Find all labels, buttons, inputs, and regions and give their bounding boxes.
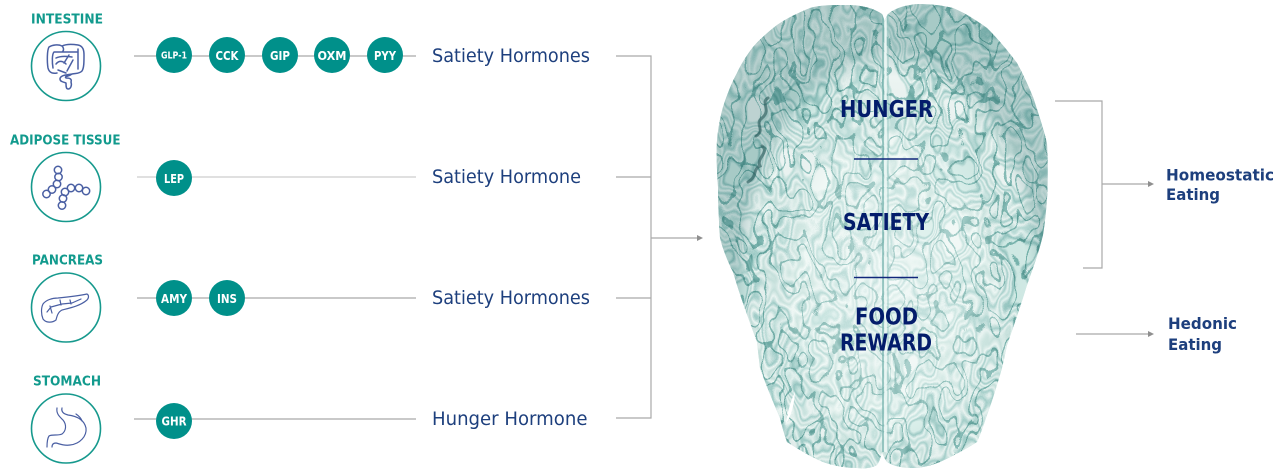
- arrow to hedonic: [1076, 331, 1154, 337]
- label: hedonic eating: [1168, 314, 1237, 354]
- icon: stomach: [32, 394, 100, 463]
- row: adipose tissue: [10, 134, 581, 222]
- brain label: food reward: [840, 304, 932, 356]
- pill: GLP-1: [156, 37, 192, 73]
- left bracket arrow: [616, 56, 703, 418]
- pill: CCK: CCK: [216, 48, 240, 63]
- pill: OXM: [314, 37, 350, 73]
- pill: GLP-1: GLP-1: [161, 50, 187, 62]
- brain label: hunger: HUNGER: [840, 97, 933, 123]
- heading: stomach: STOMACH: [33, 374, 101, 390]
- connector line intestine: [134, 55, 416, 57]
- label: homeostatic eating: [1166, 166, 1274, 204]
- label: hedonic eating: Hedonic: [1168, 314, 1237, 333]
- label: hunger hormone: Hunger Hormone: [432, 408, 588, 430]
- pill: PYY: [367, 37, 403, 73]
- heading: intestine: INTESTINE: [31, 12, 103, 28]
- heading: adipose tissue: ADIPOSE TISSUE: [10, 134, 120, 148]
- brain label: satiety: SATIETY: [843, 210, 929, 236]
- label: homeostatic eating: Homeostatic: [1166, 166, 1274, 184]
- icon: intestine: [32, 32, 100, 100]
- pill: AMY: AMY: [161, 291, 188, 306]
- row: intestine: [31, 12, 590, 100]
- glass brain image: [710, 0, 1055, 471]
- brain: [710, 0, 1055, 471]
- divider: [854, 276, 918, 278]
- label: satiety hormones: Satiety Hormones: [432, 287, 590, 309]
- icon: pancreas: [32, 273, 100, 342]
- heading: pancreas: PANCREAS: [32, 254, 103, 268]
- icon: adipose cells: [32, 152, 100, 222]
- pill: AMY: [156, 280, 192, 316]
- pill: INS: INS: [217, 291, 237, 306]
- pill: GHR: GHR: [162, 414, 187, 428]
- pill: LEP: [156, 160, 192, 196]
- divider: [854, 158, 918, 160]
- row: pancreas: [32, 254, 590, 342]
- label: homeostatic eating: Eating: [1166, 185, 1220, 204]
- connector line pancreas: [137, 297, 416, 299]
- right bracket arrow to homeostatic: [1055, 101, 1154, 268]
- pill: LEP: LEP: [164, 171, 184, 186]
- row: stomach: [32, 374, 588, 463]
- pill: OXM: OXM: [318, 48, 346, 63]
- label: satiety hormones: Satiety Hormones: [432, 45, 590, 67]
- pill: INS: [209, 280, 245, 316]
- pill: CCK: [209, 37, 245, 73]
- pill: PYY: PYY: [374, 48, 397, 63]
- label: satiety hormone: Satiety Hormone: [432, 166, 581, 188]
- brain label: food reward: REWARD: [840, 330, 932, 356]
- brain label: food reward: FOOD: [855, 304, 918, 330]
- pill: GIP: [262, 37, 298, 73]
- connector line adipose: [137, 176, 416, 178]
- pill: GHR: [156, 403, 192, 439]
- pill: GIP: GIP: [270, 48, 290, 63]
- connector line stomach: [134, 418, 416, 420]
- label: hedonic eating: Eating: [1168, 335, 1222, 354]
